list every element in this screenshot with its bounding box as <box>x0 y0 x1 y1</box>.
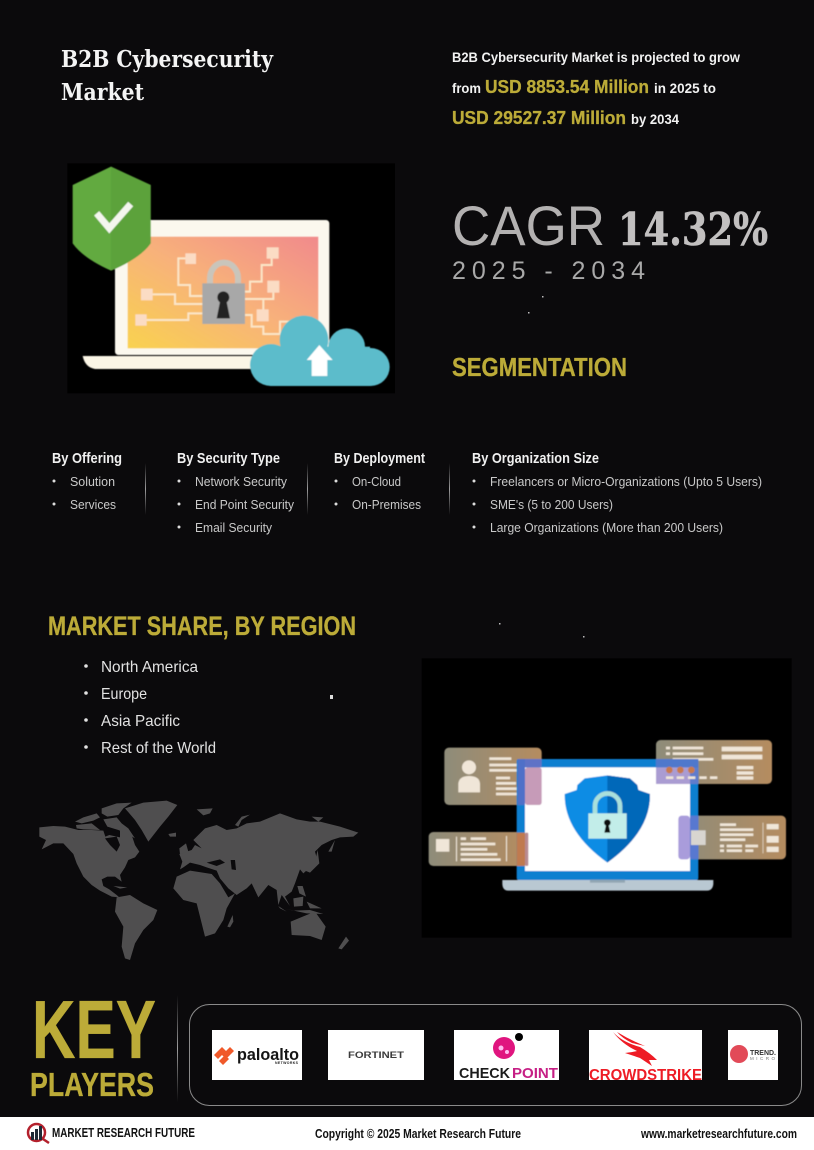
market projection text: from <box>452 80 481 96</box>
region list: North America <box>101 659 198 676</box>
segment: by deployment <box>334 450 425 512</box>
heading: segmentation: SEGMENTATION <box>452 352 627 382</box>
market projection text <box>452 49 740 128</box>
illustration: laptop with shield and data cards <box>422 658 792 938</box>
logo: Palo Alto Networks: NETWORKS <box>275 1061 299 1065</box>
logo: Fortinet <box>328 1030 424 1080</box>
logo: Check Point: POINT <box>512 1065 558 1082</box>
segment: by organization size: Freelancers or Micro-Organizations (Upto 5 Users) <box>490 474 762 489</box>
segment: by security type: Email Security <box>195 520 272 535</box>
logo: Palo Alto Networks <box>212 1030 302 1080</box>
title: B2B Cybersecurity <box>61 46 274 73</box>
market projection text: USD 29527.37 Million <box>452 108 626 128</box>
market projection text: B2B Cybersecurity Market is projected to grow <box>452 49 740 65</box>
segment: by offering: By Offering <box>52 450 122 467</box>
title: Market <box>61 79 144 106</box>
heading: key players: PLAYERS <box>30 1066 154 1103</box>
segment: by deployment: On-Premises <box>352 497 421 512</box>
CAGR figure: 2025 - 2034 <box>452 257 645 285</box>
segment: by offering <box>52 450 122 512</box>
icon: market research future logo <box>28 1124 49 1143</box>
world map <box>39 801 358 960</box>
segment: by security type: By Security Type <box>177 450 280 467</box>
region list: Rest of the World <box>101 740 216 757</box>
footer bar <box>0 1117 814 1150</box>
heading: market share by region: MARKET SHARE, BY REGION <box>48 611 356 641</box>
region list: Europe <box>101 686 147 703</box>
logo: Check Point: CHECK <box>459 1065 510 1082</box>
segment: by organization size: Large Organizations (More than 200 Users) <box>490 520 723 535</box>
logo: Palo Alto Networks: paloalto <box>237 1045 299 1064</box>
logo: Trend Micro: TREND. <box>750 1050 776 1057</box>
segment: by offering: Solution <box>70 474 115 489</box>
logo: CrowdStrike: CROWDSTRIKE <box>589 1067 702 1084</box>
illustration: laptop with lock, shield and cloud <box>67 163 395 393</box>
segment: by deployment: On-Cloud <box>352 474 401 489</box>
footer brand name: MARKET RESEARCH FUTURE <box>52 1126 195 1140</box>
segment: by security type: End Point Security <box>195 497 294 512</box>
region list: Asia Pacific <box>101 713 180 730</box>
panel: key player logos <box>190 1004 802 1106</box>
segment: by security type <box>177 450 294 535</box>
region list <box>84 659 216 757</box>
logo: Fortinet: FORTINET <box>348 1050 405 1060</box>
logo: Trend Micro <box>728 1030 778 1080</box>
segment: by organization size: SME's (5 to 200 Users) <box>490 497 613 512</box>
heading: key players: KEY <box>32 983 156 1076</box>
heading: key players <box>30 983 156 1103</box>
logo: Trend Micro: MICRO <box>750 1056 775 1061</box>
CAGR figure: CAGR <box>452 194 605 257</box>
market projection text: in 2025 to <box>654 80 716 96</box>
segment: by offering: Services <box>70 497 116 512</box>
specks <box>330 296 584 699</box>
title <box>61 46 274 106</box>
footer copyright: Copyright © 2025 Market Research Future <box>315 1127 521 1141</box>
segment: by organization size: By Organization Size <box>472 450 599 467</box>
segment: by deployment: By Deployment <box>334 450 425 467</box>
market projection text: by 2034 <box>631 111 679 127</box>
CAGR figure: 14.32% <box>618 203 768 256</box>
market projection text: USD 8853.54 Million <box>485 77 649 97</box>
logo: CrowdStrike <box>589 1030 702 1084</box>
CAGR figure <box>452 194 768 285</box>
segment: by organization size <box>472 450 762 535</box>
segment: by security type: Network Security <box>195 474 287 489</box>
logo: Check Point <box>454 1030 559 1082</box>
